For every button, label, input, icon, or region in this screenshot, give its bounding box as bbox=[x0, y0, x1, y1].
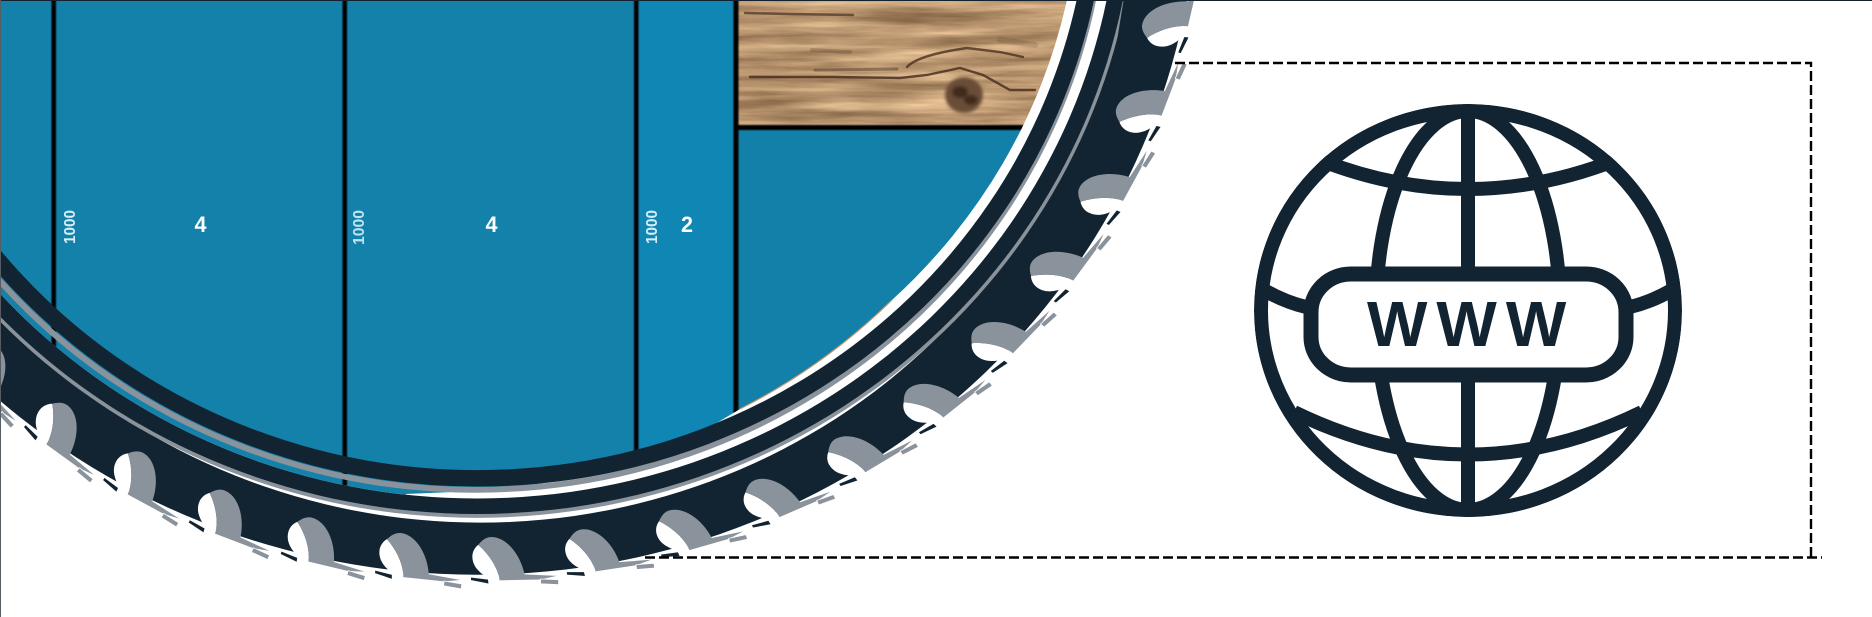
globe central meridian bbox=[1461, 111, 1475, 510]
label 2: 2 bbox=[681, 212, 693, 237]
teal panel: first wide bbox=[54, 1, 345, 486]
saw teeth and gullets bbox=[0, 0, 1219, 595]
globe equator right bbox=[1630, 290, 1672, 307]
groove line fade at top bbox=[1119, 0, 1127, 47]
panel dimension labels bbox=[62, 210, 693, 245]
label 4 second: 4 bbox=[486, 212, 498, 237]
inner dark ring bbox=[0, 0, 1098, 478]
outer groove highlight bbox=[0, 0, 1120, 523]
top border bbox=[0, 0, 1872, 1]
saw blade body bbox=[0, 0, 1219, 595]
middle dark ring bbox=[0, 0, 1135, 514]
grey inner highlight bbox=[0, 0, 1105, 490]
teal panel: lower right bbox=[736, 128, 1022, 412]
label 1000 blurred: 1000 bbox=[351, 210, 368, 245]
label 1000: 1000 bbox=[62, 210, 79, 244]
label 1000 third: 1000 bbox=[644, 210, 661, 244]
outer groove grey line bbox=[0, 0, 1138, 518]
globe outline bbox=[1261, 111, 1675, 510]
panel artwork bbox=[1, 1, 1067, 495]
panel dividers bbox=[50, 1, 1024, 486]
left border bbox=[0, 0, 1, 617]
dashed callout frame bbox=[645, 63, 1822, 558]
teal panel: narrow bbox=[637, 1, 736, 450]
inner blade rings bbox=[0, 0, 1105, 490]
globe upper latitude bbox=[1320, 160, 1616, 189]
globe lower latitude bbox=[1294, 412, 1642, 454]
teal panel: second wide bbox=[345, 1, 636, 495]
wood knot bbox=[945, 77, 983, 113]
wood cracks bbox=[745, 13, 1035, 90]
inner gap bbox=[0, 0, 1119, 499]
globe equator left bbox=[1264, 290, 1306, 307]
tan edge sliver bbox=[740, 300, 892, 409]
www label box bbox=[1311, 274, 1626, 375]
label 4: 4 bbox=[194, 212, 207, 237]
www text: WWW bbox=[1367, 288, 1575, 360]
blade disc bbox=[0, 0, 1198, 575]
wood panel bbox=[737, 1, 1067, 128]
teal panel: far left bbox=[1, 1, 54, 345]
icon: www globe bbox=[1261, 111, 1675, 510]
globe meridian ellipse bbox=[1376, 111, 1560, 510]
